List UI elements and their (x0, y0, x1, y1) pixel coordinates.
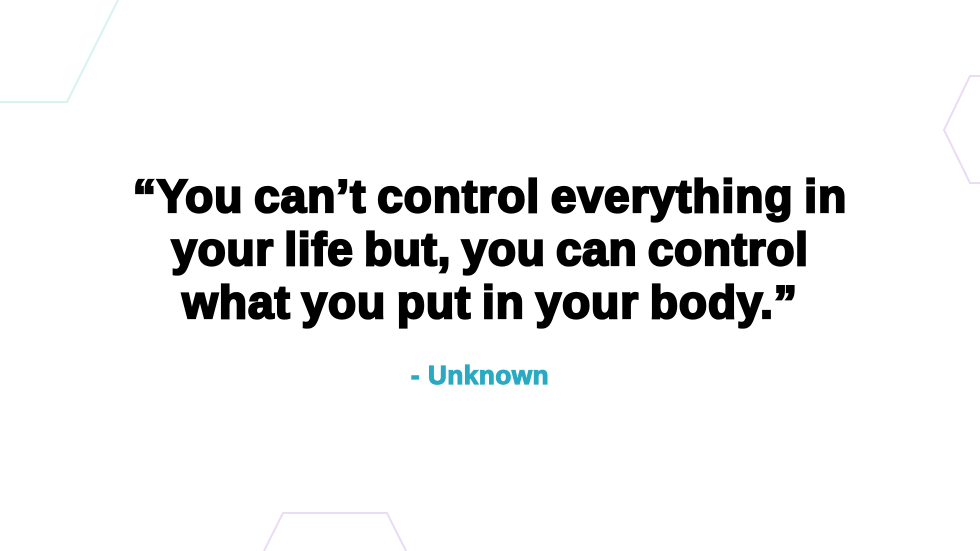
quote text (133, 170, 847, 329)
hexagon: right (944, 76, 980, 183)
hexagon: bottom (264, 513, 406, 551)
quote text: your life but, you can control (171, 223, 809, 275)
hexagon: top left (0, 0, 118, 102)
quote text: what you put in your body.” (182, 276, 798, 328)
quote text: “You can’t control everything in (133, 170, 847, 222)
attribution: - Unknown (411, 360, 549, 390)
